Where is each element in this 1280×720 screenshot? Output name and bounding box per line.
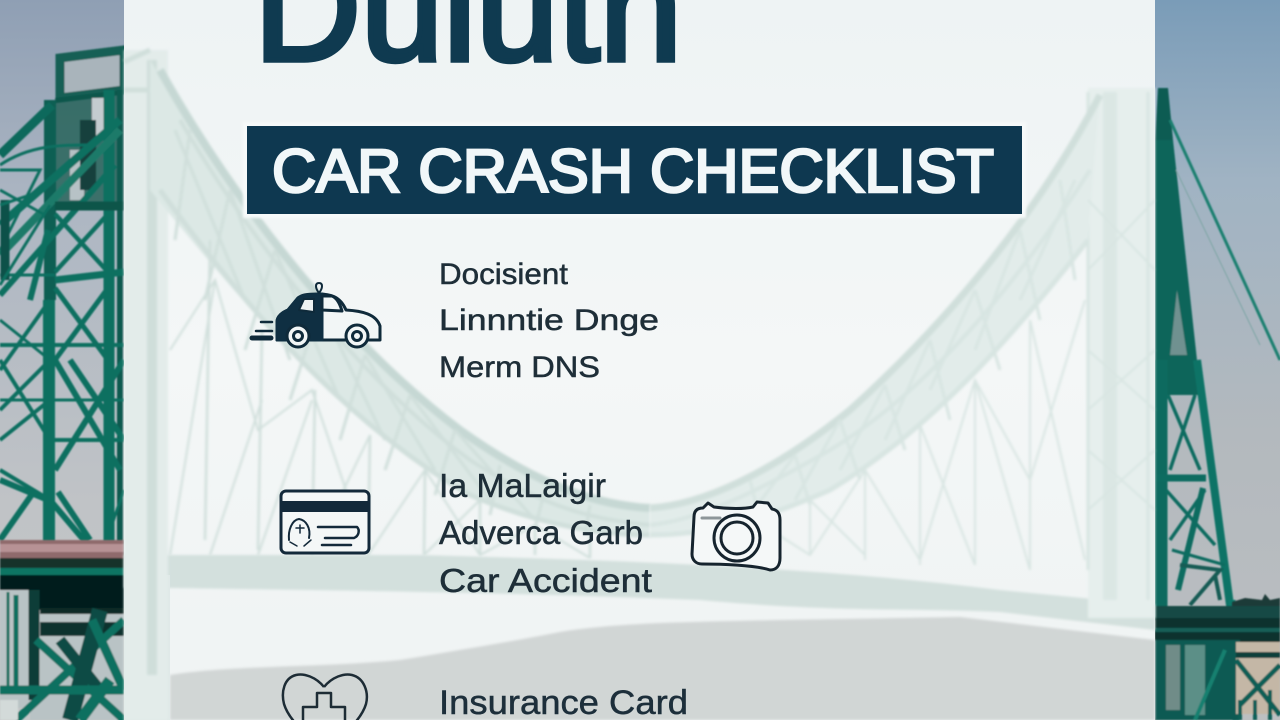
banner text: CAR CRASH CHECKLIST [272,137,994,205]
text block: car details [439,258,659,384]
right deck, trees and lower lattice [1155,594,1280,720]
text block: documents: Adverca Garb [439,514,643,551]
text block: car details: Linnntie Dnge [439,304,659,337]
banner: car crash checklist [243,122,1026,218]
text block: documents [439,467,652,599]
icon: ID card [281,491,369,553]
left deck and lower lattice [0,540,124,720]
icon: heart with medical cross [283,674,367,720]
text block: documents: Ia MaLaigir [439,467,606,504]
right bridge tower [1155,88,1280,720]
icon: camera [692,502,780,570]
left bridge tower [0,50,124,560]
text block: car details: Merm DNS [439,351,600,384]
text block: car details: Docisient [439,258,569,291]
icon: car [252,283,380,347]
faded bridge photo inside the panel [124,50,1155,720]
text block: documents: Car Accident [439,562,652,599]
